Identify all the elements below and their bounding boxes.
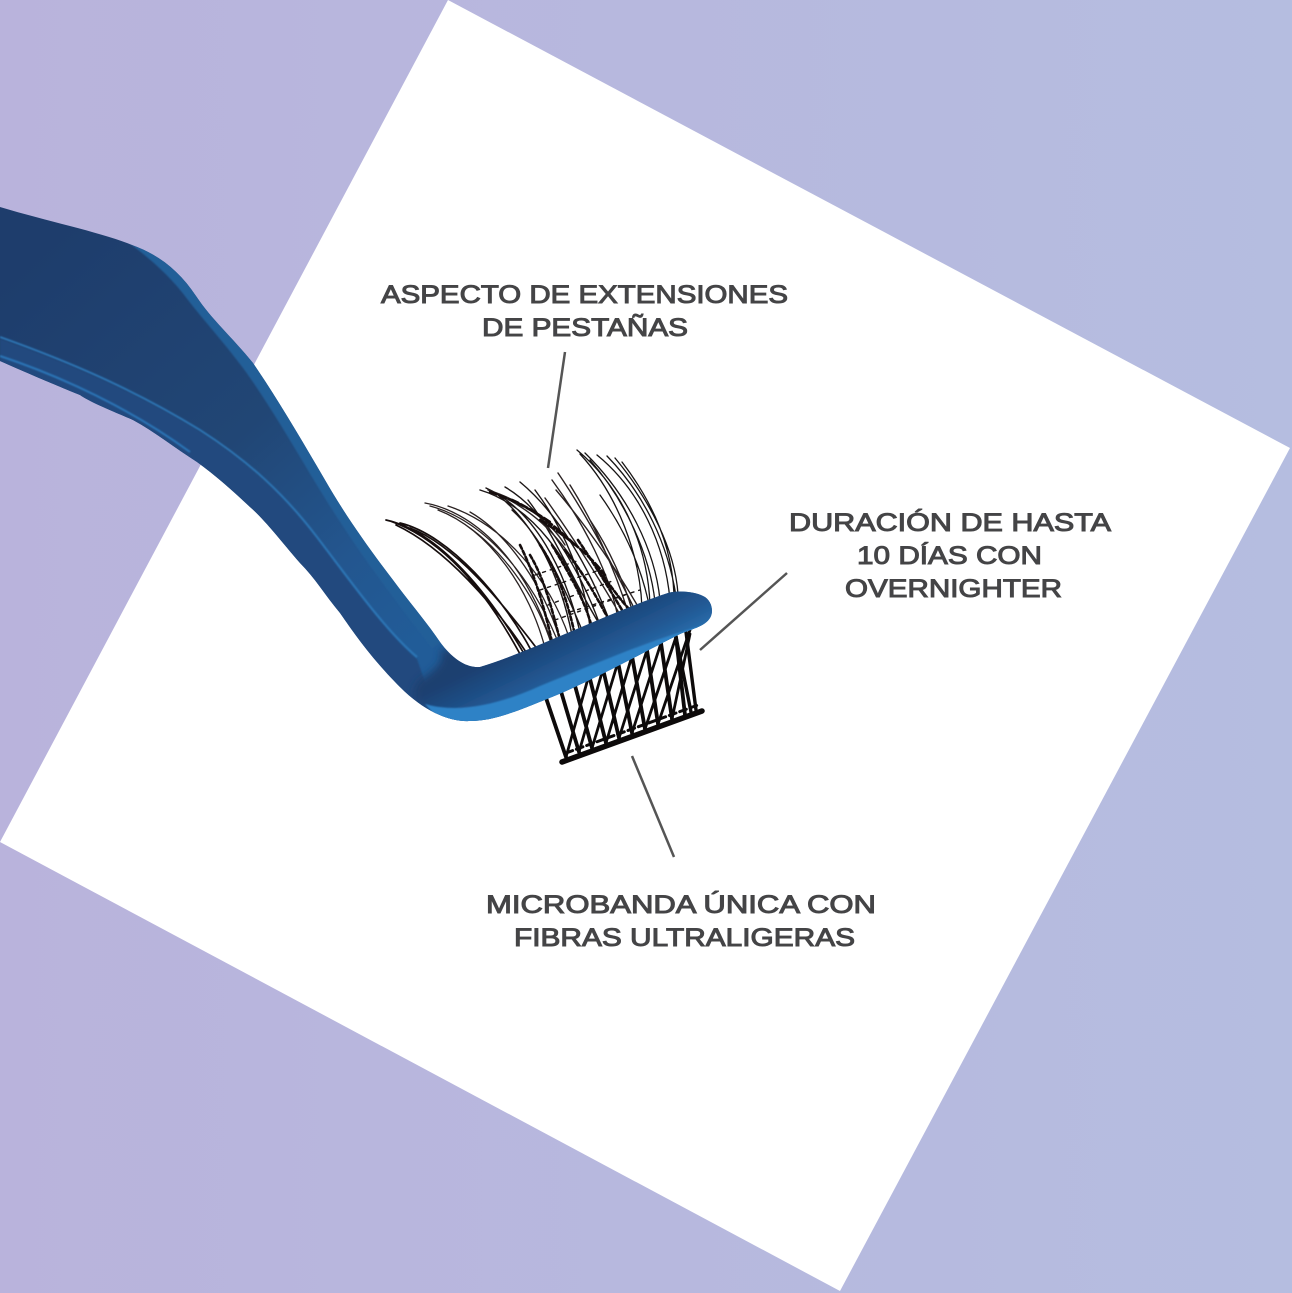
callout line: duracion <box>700 573 787 650</box>
callout line: extensiones <box>548 352 565 468</box>
callout text: microbanda: FIBRAS ULTRALIGERAS <box>514 924 855 952</box>
handle crease light line <box>0 337 417 657</box>
lashes: upper fibres <box>386 450 678 657</box>
callout text: duracion <box>789 508 1111 603</box>
callout text: microbanda: MICROBANDA ÚNICA CON <box>486 890 876 919</box>
microband <box>562 711 702 762</box>
lower handle band <box>0 339 440 725</box>
top rim highlight <box>125 240 442 648</box>
callout text: microbanda <box>486 890 876 952</box>
tweezer tip shading <box>414 592 712 722</box>
callout text: duracion: OVERNIGHTER <box>845 575 1062 603</box>
callout text: aspecto: ASPECTO DE EXTENSIONES <box>381 281 788 309</box>
icon: tweezers <box>0 190 720 730</box>
callout text: aspecto: DE PESTAÑAS <box>482 313 688 342</box>
callout text: aspecto <box>381 281 788 342</box>
callout line: microbanda <box>632 756 674 857</box>
callout text: duracion: DURACIÓN DE HASTA <box>789 508 1111 537</box>
lashes: lower crossed fibres and microband <box>545 630 702 762</box>
tweezer silhouette <box>0 190 720 730</box>
bright underside of tip <box>425 624 708 726</box>
callout text: duracion: 10 DÍAS CON <box>857 541 1042 570</box>
lower rim highlight <box>0 356 190 452</box>
